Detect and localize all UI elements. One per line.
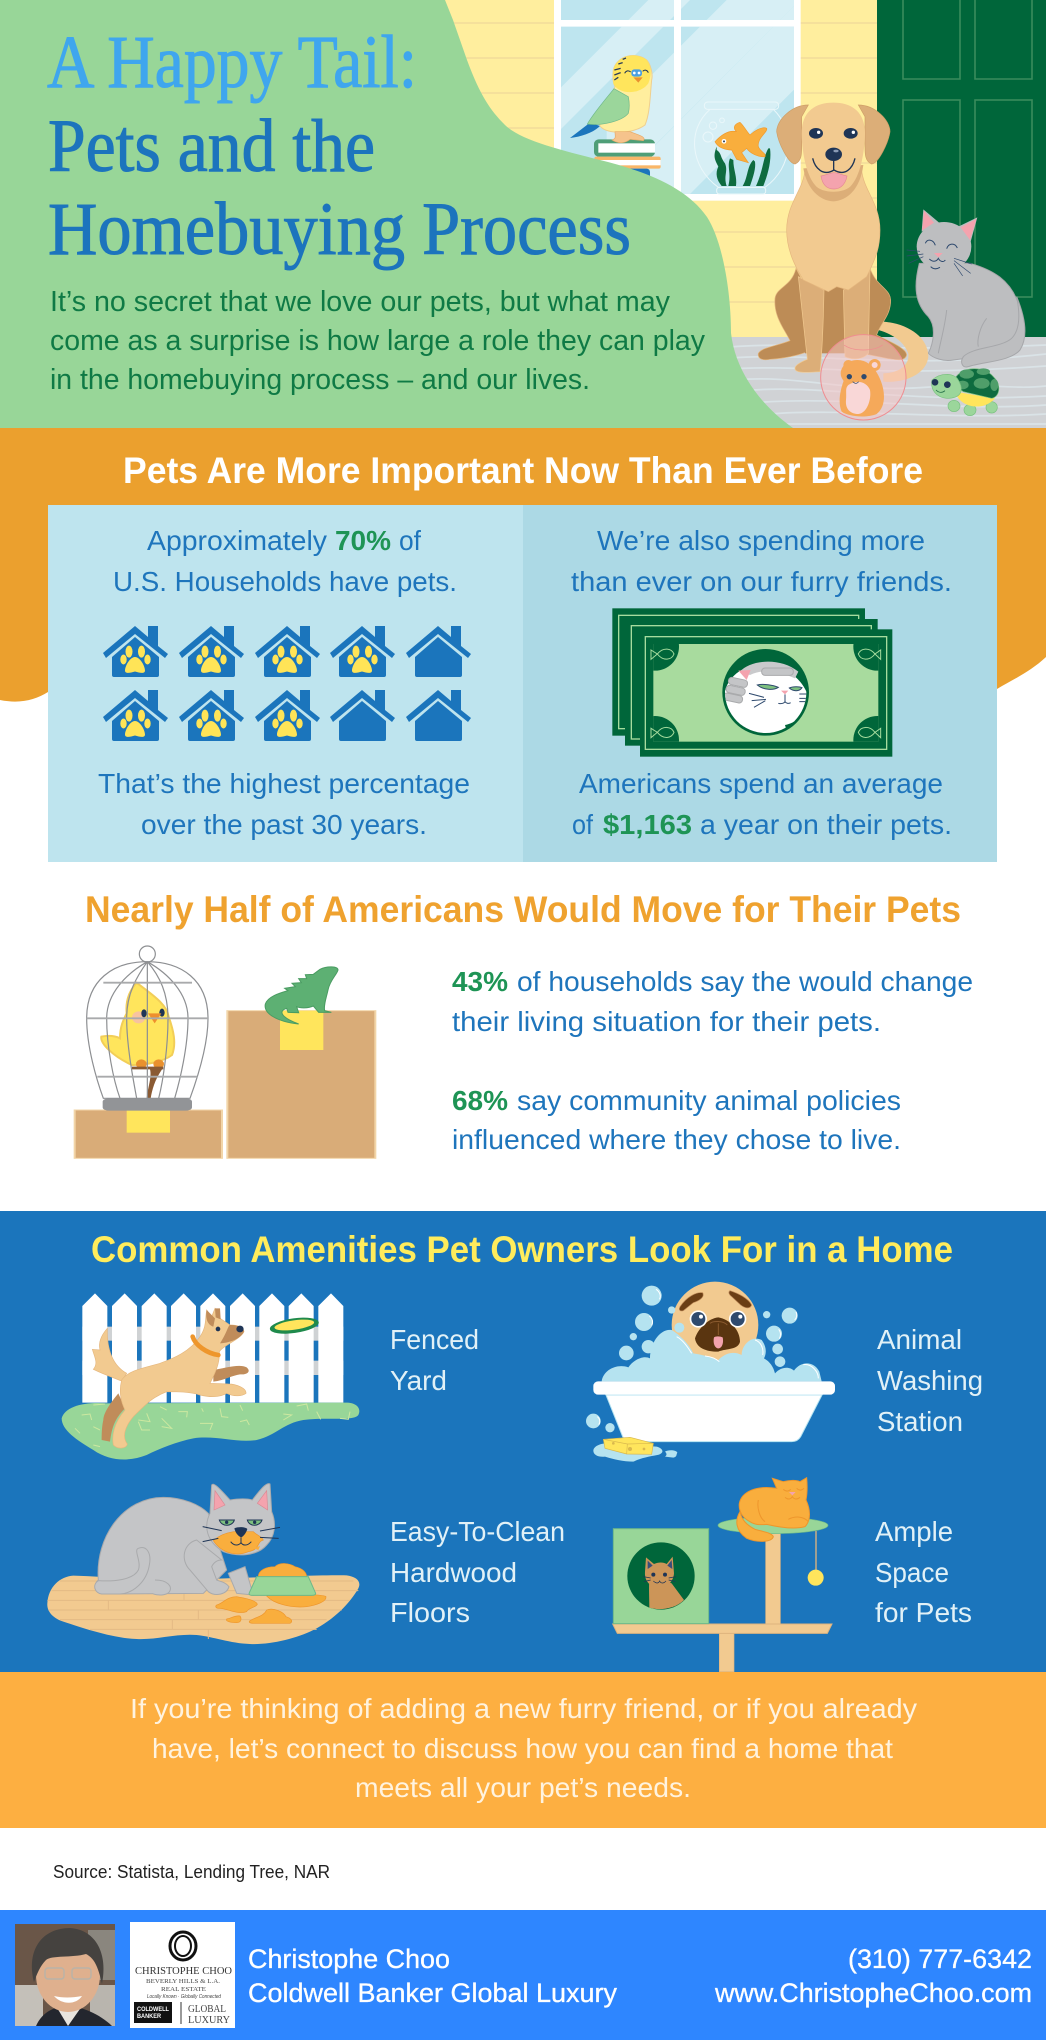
label: fenced yard: Yard: [390, 1365, 447, 1396]
intro paragraph: in the homebuying process – and our lives.: [50, 364, 590, 396]
agent logo: COLDWELL: [137, 2007, 169, 2013]
floor: [720, 337, 1046, 428]
label: animal washing station: Washing: [877, 1365, 983, 1396]
title: A Happy Tail:: [47, 21, 417, 104]
source note: Source: Statista, Lending Tree, NAR: [53, 1862, 330, 1882]
title: Pets and the: [48, 105, 375, 188]
panel: call to action: If you’re thinking of adding a new furry friend, or if you already: [130, 1693, 917, 1724]
label: easy to clean hardwood floors: [390, 1516, 565, 1628]
agent logo: LUXURY: [188, 2014, 230, 2026]
text: 68 percent statistic: influenced where they chose to live.: [452, 1124, 901, 1155]
cat: [95, 1484, 280, 1595]
label: fenced yard: [390, 1324, 479, 1396]
text: average spend: $1,163: [603, 809, 692, 840]
heading: pets are more important: Pets Are More Important Now Than Ever Before: [123, 450, 923, 491]
label: animal washing station: [877, 1324, 983, 1437]
cat: [907, 209, 1025, 367]
agent logo: GLOBAL: [188, 2003, 226, 2015]
agent logo: CHRISTOPHE CHOO: [135, 1965, 232, 1977]
icon: sponge: [603, 1437, 653, 1454]
text: 43 percent statistic: 43%: [452, 966, 508, 997]
panel: spending statistic: [523, 505, 997, 862]
label: ample space for pets: Ample: [875, 1516, 953, 1547]
text: approximately 70 percent: of: [399, 525, 421, 556]
text: average spend: Americans spend an average: [579, 768, 943, 799]
agent logo: Locally Known · Globally Connected: [147, 1994, 222, 2000]
label: easy to clean hardwood floors: Easy-To-Clean: [390, 1516, 565, 1547]
panel: call to action: have, let’s connect to discuss how you can find a home that: [152, 1733, 893, 1764]
text: spending more: than ever on our furry friends.: [571, 566, 952, 597]
sleeping cat: [737, 1478, 810, 1541]
label: ample space for pets: for Pets: [875, 1597, 972, 1628]
text: highest percentage: over the past 30 years.: [141, 809, 427, 840]
footer bar: [0, 1910, 1046, 2040]
window with bird and fish bowl: [554, 0, 801, 201]
label: ample space for pets: [875, 1516, 972, 1628]
text: approximately 70 percent: [113, 525, 457, 597]
icon grid: houses with paws: [103, 626, 471, 741]
text: 68 percent statistic: 68%: [452, 1085, 508, 1116]
panel: household statistic: [48, 505, 523, 862]
label: ample space for pets: Space: [875, 1557, 949, 1588]
text: approximately 70 percent: U.S. Households have pets.: [113, 566, 457, 597]
illustration: dog in fenced yard: [62, 1293, 359, 1460]
label: animal washing station: Station: [877, 1406, 963, 1437]
orange section background: [0, 428, 1046, 702]
illustration: cat eating on hardwood floor: [47, 1484, 359, 1644]
text: highest percentage: That’s the highest percentage: [98, 768, 470, 799]
intro paragraph: [50, 286, 705, 396]
intro paragraph: It’s no secret that we love our pets, but what may: [50, 286, 670, 318]
agent logo: REAL ESTATE: [161, 1986, 206, 1993]
text: highest percentage: [98, 768, 470, 840]
dog, cat, hamster and turtle: [758, 103, 1025, 420]
text: 43 percent statistic: of households say the would change: [517, 966, 973, 997]
text: spending more: We’re also spending more: [597, 525, 925, 556]
title: Homebuying Process: [48, 188, 631, 271]
agent logo: BEVERLY HILLS & L.A.: [146, 1978, 220, 1985]
food bowl and spills: [216, 1564, 326, 1623]
agent name and company: Coldwell Banker Global Luxury: [248, 1978, 618, 2008]
text: 68 percent statistic: say community animal policies: [517, 1085, 901, 1116]
agent logo: [130, 1922, 235, 2028]
turtle: [932, 368, 999, 416]
heading: common amenities: Common Amenities Pet Owners Look For in a Home: [91, 1229, 953, 1270]
illustration: cat tree with two cats: [613, 1478, 832, 1672]
illustration: caged bird and iguana on moving boxes: [75, 946, 375, 1158]
intro paragraph: come as a surprise is how large a role they can play: [50, 325, 705, 357]
agent logo: BANKER: [137, 2014, 162, 2020]
hamster in ball: [821, 335, 906, 420]
wall: [440, 0, 880, 340]
panel: call to action: meets all your pet’s needs.: [355, 1772, 691, 1803]
text: approximately 70 percent: Approximately: [147, 525, 327, 556]
bird cage: [87, 946, 208, 1111]
cat in window: [643, 1557, 684, 1609]
panel: call to action: [0, 1672, 1046, 1828]
moving boxes: [75, 1011, 375, 1158]
contact details: www.ChristopheChoo.com: [714, 1978, 1032, 2008]
contact details: [714, 1944, 1032, 2008]
text: average spend: [572, 768, 952, 840]
icon: goldfish bowl: [695, 102, 788, 194]
dog: [758, 103, 928, 382]
contact details: (310) 777-6342: [848, 1944, 1032, 1974]
title: [47, 21, 631, 271]
icon: stack of cat banknotes: [612, 608, 901, 764]
icon: frisbee: [269, 1315, 320, 1336]
label: easy to clean hardwood floors: Floors: [390, 1597, 470, 1628]
text: 43 percent statistic: [452, 966, 973, 1037]
text: average spend: a year on their pets.: [700, 809, 952, 840]
door: [877, 0, 1046, 340]
text: 43 percent statistic: their living situation for their pets.: [452, 1006, 881, 1037]
illustration: pug in bath tub: [586, 1282, 835, 1462]
panel: amenities section background: [0, 1211, 1046, 1672]
text: average spend: of: [572, 809, 593, 840]
agent photo: [15, 1924, 115, 2026]
agent name and company: [248, 1944, 618, 2008]
heading: nearly half: Nearly Half of Americans Would Move for Their Pets: [85, 889, 961, 930]
text: 68 percent statistic: [452, 1085, 901, 1155]
icon: bird on books: [570, 56, 661, 179]
label: easy to clean hardwood floors: Hardwood: [390, 1557, 517, 1588]
agent name and company: Christophe Choo: [248, 1944, 450, 1974]
header scene: house, window and pets: [0, 0, 1046, 428]
text: spending more: [571, 525, 952, 597]
iguana: [265, 967, 338, 1024]
label: fenced yard: Fenced: [390, 1324, 479, 1355]
label: animal washing station: Animal: [877, 1324, 962, 1355]
text: approximately 70 percent: 70%: [335, 525, 391, 556]
green title blob: [0, 0, 793, 428]
